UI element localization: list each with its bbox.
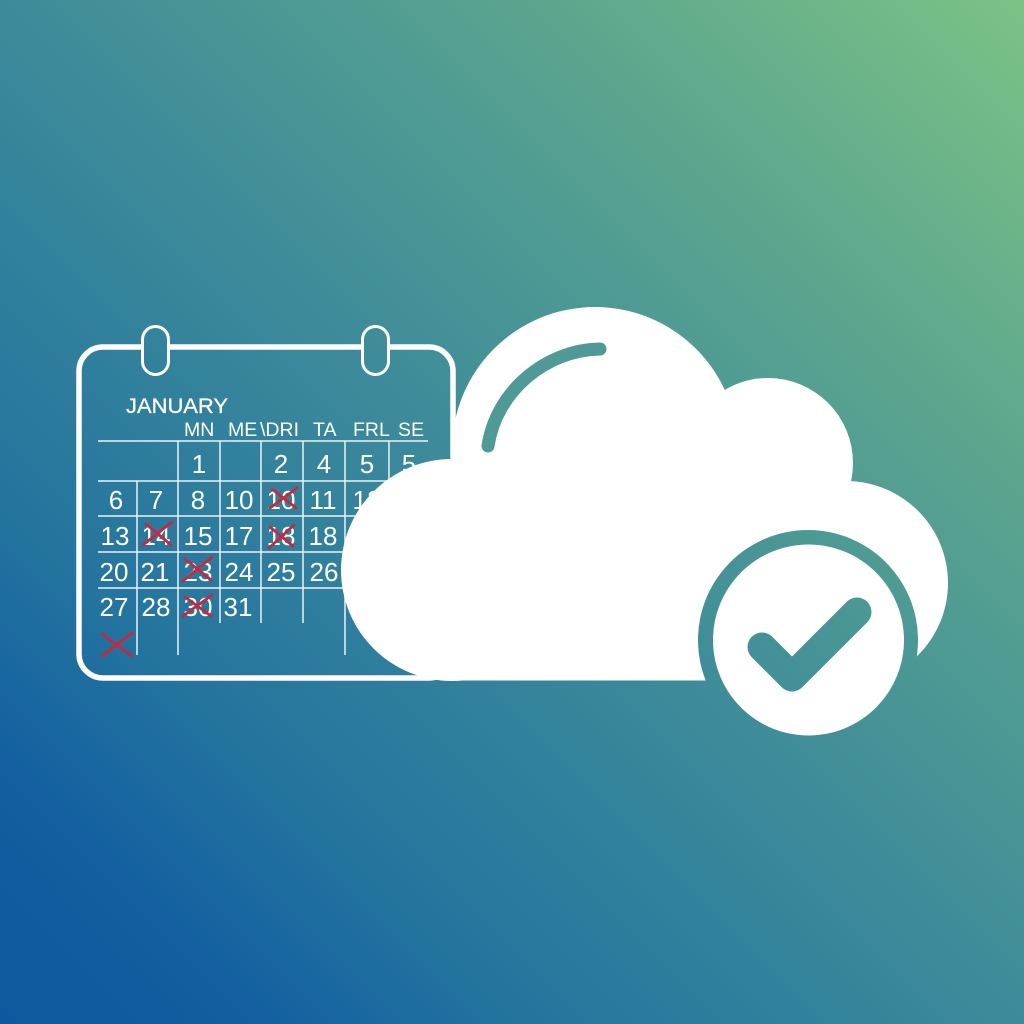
- calendar dates: 18: [309, 521, 337, 551]
- weekday headers: \DRI: [260, 419, 299, 441]
- calendar dates: 23: [184, 557, 212, 587]
- calendar dates: 2: [274, 449, 288, 479]
- calendar: [79, 326, 453, 678]
- calendar dates: [100, 449, 416, 622]
- calendar dates: 5: [360, 449, 374, 479]
- weekday headers: SE: [398, 419, 424, 441]
- calendar dates: 26: [310, 557, 338, 587]
- weekday headers: TA: [313, 419, 336, 441]
- calendar dates: 24: [225, 557, 253, 587]
- red cross marks: [102, 488, 297, 656]
- calendar dates: 20: [100, 557, 128, 587]
- calendar grid: [98, 441, 428, 655]
- calendar dates: 10: [225, 485, 253, 515]
- calendar dates: 4: [317, 449, 331, 479]
- calendar dates: 21: [141, 557, 169, 587]
- check badge: [698, 530, 918, 750]
- calendar dates: 5: [402, 449, 416, 479]
- calendar dates: 1: [192, 449, 206, 479]
- cloud: [341, 307, 948, 685]
- check mark: [762, 612, 857, 677]
- calendar dates: 15: [184, 521, 212, 551]
- calendar frame: [79, 347, 453, 678]
- badge ring: [698, 530, 918, 750]
- calendar dates: 25: [267, 557, 295, 587]
- calendar dates: 13: [101, 521, 129, 551]
- month title: JANUARY: [126, 394, 228, 418]
- calendar dates: 18: [267, 521, 295, 551]
- calendar dates: 27: [100, 592, 128, 622]
- weekday headers: FRL: [353, 419, 390, 441]
- calendar dates: 8: [191, 485, 205, 515]
- badge disc: [713, 544, 904, 736]
- weekday headers: ME: [228, 419, 257, 441]
- calendar dates: 7: [149, 485, 163, 515]
- weekday headers: [184, 419, 424, 441]
- cloud highlight arc: [488, 349, 600, 446]
- calendar dates: 14: [142, 521, 170, 551]
- calendar dates: 12: [353, 485, 381, 515]
- calendar dates: 28: [142, 592, 170, 622]
- cloud body: [341, 307, 948, 685]
- calendar dates: 30: [184, 592, 212, 622]
- calendar dates: 17: [225, 521, 253, 551]
- calendar dates: 11: [310, 485, 336, 515]
- calendar dates: 10: [267, 485, 295, 515]
- weekday headers: MN: [184, 419, 214, 441]
- calendar dates: 6: [109, 485, 123, 515]
- calendar dates: 31: [224, 592, 252, 622]
- calendar binding rings: [142, 326, 388, 374]
